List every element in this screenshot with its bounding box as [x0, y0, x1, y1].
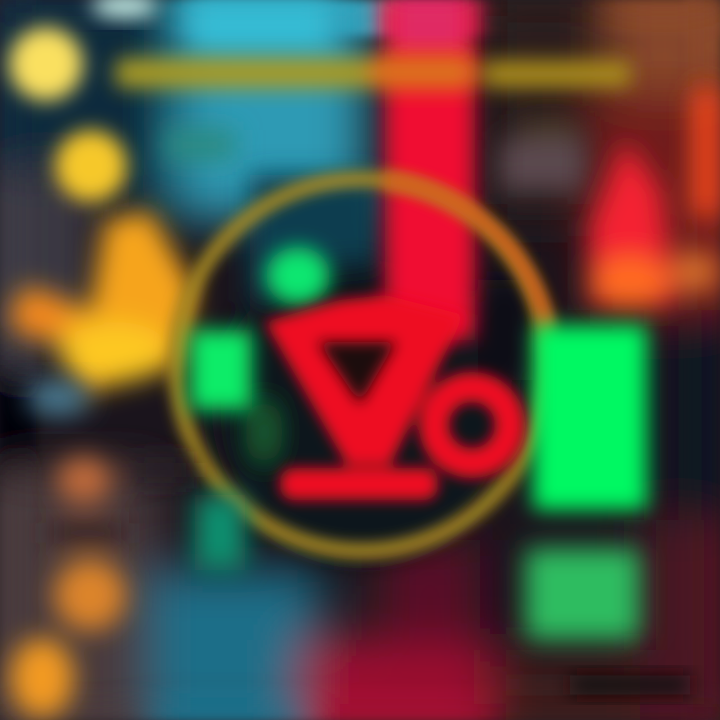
- top-left lights: [9, 0, 159, 202]
- blue glow under figure: [26, 380, 90, 416]
- lower-right dark streak: [570, 675, 690, 695]
- green-teal reflection left: [195, 495, 245, 570]
- red upper-right shapes: [590, 85, 720, 308]
- light: yellow large: [9, 27, 83, 101]
- ring orange arc: [385, 180, 548, 330]
- edge strips: top: [0, 0, 720, 36]
- green panel right: [533, 325, 647, 510]
- teal upper brightening: [190, 0, 330, 50]
- orange glow figure: [10, 210, 195, 395]
- edge strips: bottom: [0, 684, 720, 720]
- light: white top: [91, 0, 159, 18]
- green small top: [266, 247, 330, 305]
- faint blocks at top: [165, 120, 585, 190]
- heading band: golden blurred title: [115, 54, 632, 90]
- glass bowl: [265, 295, 464, 465]
- edge strips: left: [0, 0, 36, 720]
- circle inner shade: [212, 175, 533, 560]
- gold ring: [176, 179, 548, 551]
- red glyph: glass and ring: [265, 295, 510, 500]
- light: yellow small: [55, 130, 127, 202]
- green reflection: [525, 548, 640, 640]
- ring: [434, 387, 510, 463]
- lower-left orange reflections: [10, 456, 190, 718]
- red neon column: [385, 0, 475, 340]
- dark glass center: [318, 342, 396, 404]
- edge strips: right: [684, 0, 720, 720]
- green square left: [190, 330, 252, 410]
- glass base: [280, 468, 438, 500]
